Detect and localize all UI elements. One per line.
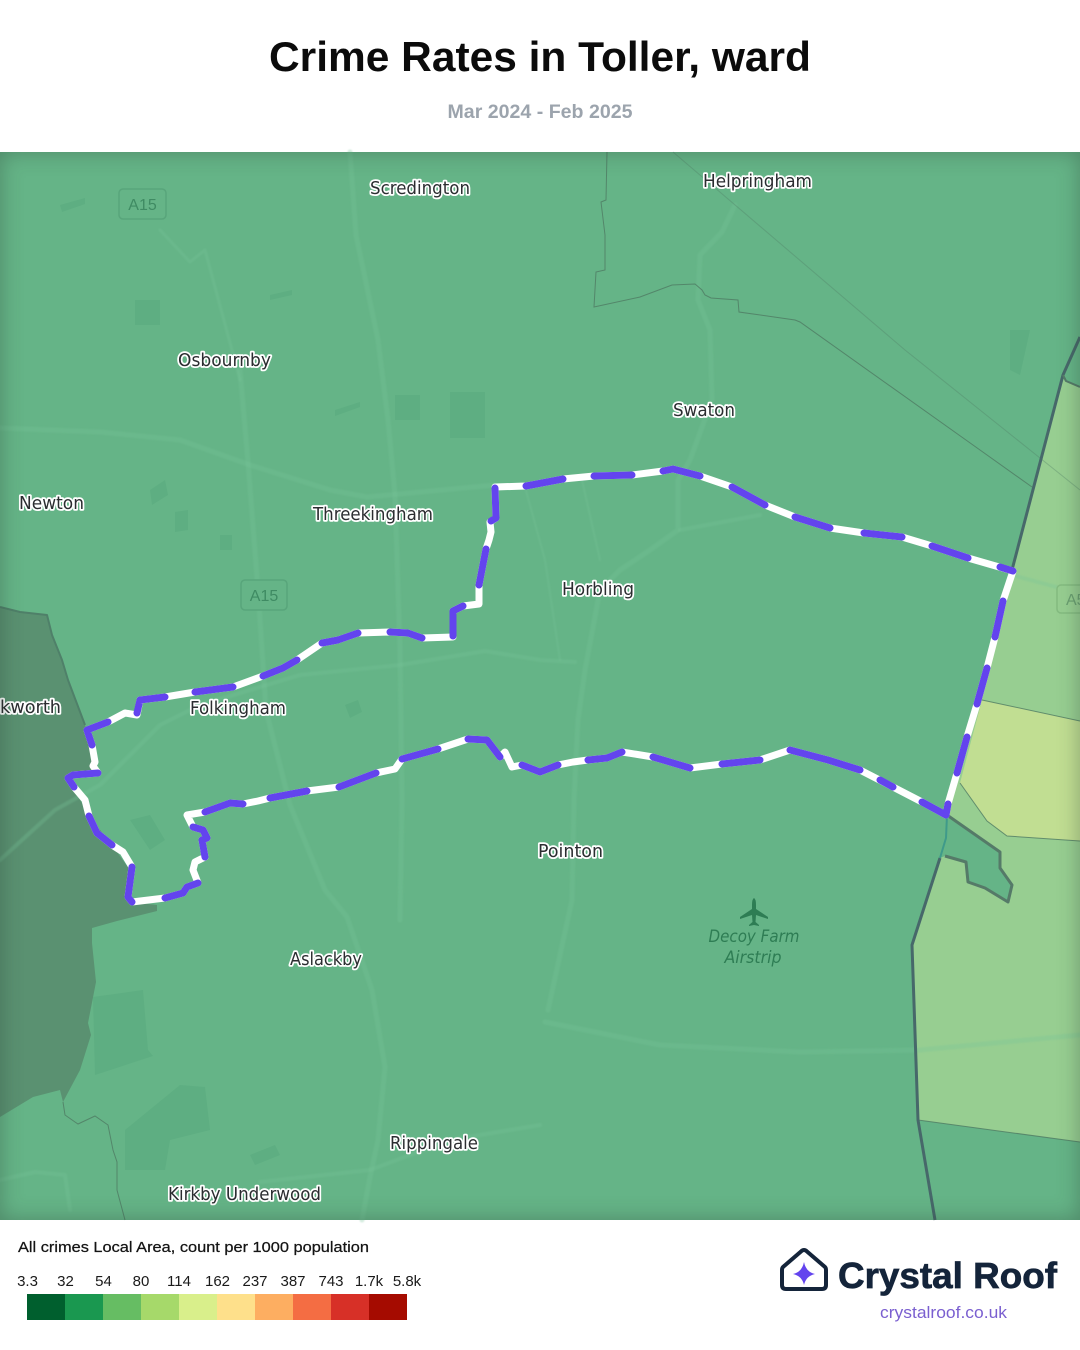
legend tick labels: 54	[95, 1273, 112, 1290]
legend tick labels: 114	[167, 1273, 191, 1290]
place labels: Horbling	[562, 579, 634, 600]
woodland patches	[60, 198, 1030, 1170]
title: Crime Rates in Toller, ward	[269, 33, 811, 80]
legend tick labels: 32	[57, 1273, 74, 1290]
legend tick labels: 1.7k	[355, 1273, 384, 1290]
road shield: A15 north: A15	[128, 197, 157, 214]
place labels: Rippingale	[390, 1133, 478, 1154]
place labels: Helpringham	[703, 171, 812, 192]
road network	[0, 152, 1080, 1220]
website url: crystalroof.co.uk	[880, 1304, 1008, 1322]
panel: map	[0, 152, 1080, 1220]
legend tick labels	[17, 1273, 422, 1290]
label: Decoy Farm Airstrip: Airstrip	[724, 948, 782, 968]
region: pale green east area	[912, 375, 1080, 1142]
region: yellow east area	[960, 700, 1080, 841]
ward boundary: Toller	[68, 469, 1013, 902]
road shield: A15 north	[119, 189, 166, 219]
logo wordmark: Crystal Roof	[838, 1255, 1058, 1296]
road shield: A15 south	[241, 580, 287, 610]
place labels: Aslackby	[290, 949, 362, 970]
thin boundary lines	[63, 152, 1080, 1220]
place labels: Osbournby	[178, 350, 271, 371]
thick area boundaries	[0, 337, 1080, 1220]
place labels: Kirkby Underwood	[168, 1184, 321, 1205]
place labels: Newton	[19, 493, 84, 514]
place labels: Scredington	[370, 178, 470, 199]
icon: airstrip plane	[740, 898, 768, 926]
region: higher-crime west area	[0, 607, 157, 1117]
subtitle: date range: Mar 2024 - Feb 2025	[448, 102, 633, 123]
legend tick labels: 387	[280, 1273, 306, 1290]
legend tick labels: 3.3	[17, 1273, 38, 1290]
label: Decoy Farm Airstrip: Decoy Farm	[708, 927, 800, 947]
legend tick labels: 80	[133, 1273, 149, 1290]
icon: Crystal Roof house logo	[782, 1250, 826, 1289]
road shield: A52 east	[1057, 585, 1080, 613]
place labels	[0, 171, 812, 1205]
legend tick labels: 743	[318, 1273, 344, 1290]
legend colour scale	[27, 1294, 407, 1320]
label: Decoy Farm Airstrip	[708, 927, 800, 968]
legend title: All crimes Local Area, count per 1000 population	[18, 1239, 369, 1256]
legend tick labels: 162	[205, 1273, 230, 1290]
place labels: Folkingham	[190, 698, 286, 719]
place labels: Swaton	[673, 400, 735, 421]
legend tick labels: 5.8k	[393, 1273, 422, 1290]
legend tick labels: 237	[242, 1273, 268, 1290]
map edge vignette	[0, 152, 1080, 1220]
place labels: Threekingham	[312, 504, 433, 525]
place labels: Pointon	[538, 841, 603, 862]
road shield: A15 south: A15	[250, 588, 278, 605]
